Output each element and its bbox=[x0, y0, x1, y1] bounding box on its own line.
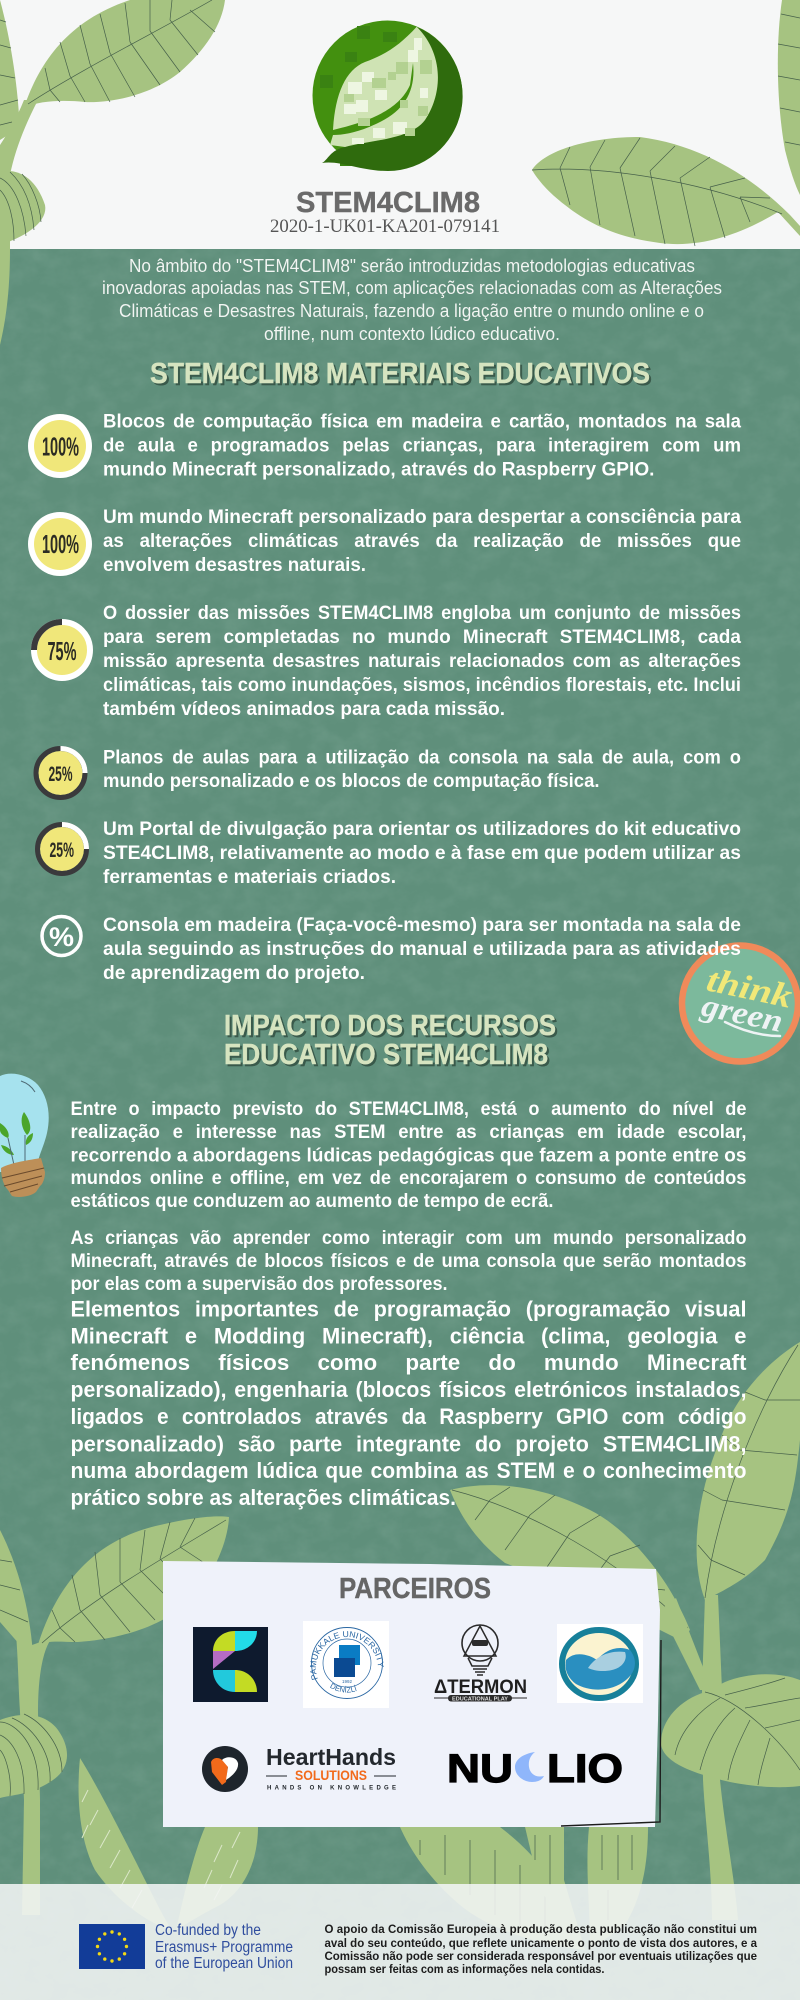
impact text 3 bbox=[70, 1296, 747, 1510]
text: Um Portal de divulgação para orientar os utilizadores do kit educativo bbox=[103, 818, 741, 840]
text: de aula e programados pelas crianças, para interagirem com um bbox=[103, 434, 741, 456]
text: climáticas, tais como inundações, sismos, incêndios florestais, etc. Inclui bbox=[103, 674, 741, 696]
impact text 1: mundos online e offline, em vez de encorajarem o consumo de conteúdos bbox=[70, 1167, 747, 1189]
impact text 2: por elas com a supervisão dos professores. bbox=[70, 1273, 448, 1295]
text: O dossier das missões STEM4CLIM8 engloba um conjunto de missões bbox=[103, 602, 741, 624]
logo: HeartHands Solutions: HeartHands bbox=[266, 1744, 396, 1770]
text: as alterações climáticas através da realização de missões que bbox=[103, 530, 741, 552]
logo: STEM4CLIM8 leaf emblem bbox=[312, 20, 463, 171]
co-funded text: Erasmus+ Programme bbox=[155, 1939, 293, 1956]
impact text 3: numa abordagem lúdica que combina as STEM e o conhecimento bbox=[70, 1458, 746, 1483]
disclaimer: O apoio da Comissão Europeia à produção desta publicação não constitui um bbox=[324, 1924, 757, 1936]
logo: NUCLIO: NU bbox=[447, 1747, 513, 1791]
logo: NUCLIO: LIO bbox=[547, 1747, 623, 1791]
logo: Pamukkale University: DENİZLİ bbox=[330, 1683, 356, 1693]
logo: HeartHands Solutions: HANDS ON KNOWLEDGE bbox=[267, 1786, 396, 1792]
intro text bbox=[102, 255, 722, 344]
logo: Pamukkale University bbox=[303, 1621, 389, 1708]
project code: 2020-1-UK01-KA201-079141 bbox=[270, 217, 500, 237]
text: ferramentas e materiais criados. bbox=[103, 866, 396, 888]
material 6 bbox=[42, 914, 741, 984]
icon: light bulb bbox=[0, 1074, 49, 1197]
impact text 3: fenómenos físicos como parte do mundo Minecraft bbox=[70, 1350, 747, 1375]
progress ring 75%: 75% bbox=[48, 636, 76, 666]
text: STE4CLIM8, relativamente ao modo e à fase em que podem utilizar as bbox=[103, 842, 741, 864]
logo: K bbox=[193, 1627, 268, 1702]
progress ring 100% bbox=[28, 512, 92, 576]
logo: Pamukkale University: PAMUKKALE UNIVERSITY bbox=[310, 1631, 384, 1680]
disclaimer: Comissão não pode ser considerada responsável por eventuais utilizações que bbox=[324, 1951, 757, 1963]
text: Blocos de computação física em madeira e cartão, montados na sala bbox=[103, 410, 741, 432]
material 5 bbox=[38, 818, 741, 888]
intro text: No âmbito do "STEM4CLIM8" serão introduzidas metodologias educativas bbox=[129, 255, 695, 276]
material 2 bbox=[28, 506, 741, 576]
impact text 3: personalizado), engenharia (blocos físicos eletrónicos instalados, bbox=[70, 1377, 746, 1402]
impact text 3: ligados e controlados através da Raspberry GPIO com código bbox=[70, 1404, 746, 1429]
text: envolvem desastres naturais. bbox=[103, 554, 366, 576]
impact text 3: Elementos importantes de programação (programação visual bbox=[70, 1296, 746, 1322]
impact text 2: As crianças vão aprender como interagir com um mundo personalizado bbox=[70, 1227, 747, 1249]
title: STEM4CLIM8: STEM4CLIM8 bbox=[296, 187, 480, 219]
impact text 1: Entre o impacto previsto do STEM4CLIM8, está o aumento do nível de bbox=[70, 1098, 747, 1120]
co-funded text: of the European Union bbox=[155, 1955, 293, 1972]
progress ring 100%: 100% bbox=[42, 432, 79, 462]
intro text: inovadoras apoiadas nas STEM, com aplicações relacionadas com as Alterações bbox=[102, 277, 722, 298]
impact text 1 bbox=[70, 1098, 747, 1212]
text: para serem completadas no mundo Minecraft STEM4CLIM8, cada bbox=[103, 626, 741, 648]
disclaimer bbox=[324, 1924, 758, 1976]
heading: impacto bbox=[224, 1010, 556, 1071]
intro text: Climáticas e Desastres Naturais, fazendo a ligação entre o mundo online e o bbox=[119, 300, 704, 321]
impact text 1: realização e interesse nas STEM entre as crianças em idade escolar, bbox=[70, 1121, 746, 1143]
material 3 bbox=[34, 602, 741, 720]
heading: impacto: IMPACTO DOS RECURSOS bbox=[224, 1010, 556, 1042]
material 4 bbox=[36, 746, 741, 798]
logo: EU flag bbox=[79, 1924, 145, 1969]
impact text 3: prático sobre as alterações climáticas. bbox=[70, 1485, 456, 1510]
logo: water association bbox=[557, 1624, 643, 1703]
leaves: bottom plants bbox=[0, 1342, 800, 1950]
text: mundo Minecraft personalizado, através do Raspberry GPIO. bbox=[103, 458, 654, 480]
text bbox=[103, 818, 741, 888]
logo: Pamukkale University: 1992 bbox=[342, 1679, 353, 1684]
heading: impacto: EDUCATIVO STEM4CLIM8 bbox=[224, 1039, 548, 1071]
text: também vídeos animados para cada missão. bbox=[103, 698, 505, 720]
impact text 2: Minecraft, através de blocos físicos e de uma consola que serão montados bbox=[70, 1250, 747, 1272]
text bbox=[103, 914, 741, 984]
text bbox=[103, 410, 741, 480]
progress ring 75% bbox=[34, 622, 90, 678]
progress ring 25%: 25% bbox=[50, 839, 74, 862]
text: mundo personalizado e os blocos de computação física. bbox=[103, 770, 600, 792]
icon: percent: % bbox=[49, 922, 74, 952]
disclaimer: aval do seu conteúdo, que reflete unicamente o ponto de vista dos autores, e a bbox=[324, 1938, 758, 1950]
logo: Atermon bbox=[434, 1625, 527, 1702]
intro text: offline, num contexto lúdico educativo. bbox=[264, 323, 560, 344]
progress ring 25% bbox=[38, 824, 86, 874]
impact text 3: personalizado) são parte integrante do projeto STEM4CLIM8, bbox=[70, 1432, 746, 1456]
text: Planos de aulas para a utilização da consola na sala de aula, com o bbox=[103, 746, 741, 768]
footer band bbox=[0, 1884, 800, 2000]
progress ring 25% bbox=[36, 748, 85, 798]
text bbox=[103, 506, 741, 576]
text bbox=[103, 602, 741, 720]
material 1 bbox=[28, 410, 741, 480]
heading: parceiros: PARCEIROS bbox=[339, 1573, 491, 1605]
progress ring 25%: 25% bbox=[48, 763, 73, 786]
logo: Atermon: ΔTERMON bbox=[434, 1677, 527, 1698]
panel: parceiros bbox=[163, 1561, 662, 1827]
co-funded text bbox=[155, 1922, 293, 1972]
badge: think green bbox=[682, 946, 798, 1062]
logo: HeartHands Solutions bbox=[202, 1744, 396, 1792]
leaves: top right plant bbox=[532, 0, 800, 246]
impact text 2 bbox=[70, 1227, 747, 1295]
logo: NUCLIO bbox=[447, 1747, 623, 1791]
disclaimer: possam ser feitas com as informações nela contidas. bbox=[324, 1964, 604, 1976]
badge: think green: green bbox=[697, 986, 786, 1039]
text: Consola em madeira (Faça-você-mesmo) para ser montada na sala de bbox=[103, 914, 741, 936]
text bbox=[103, 746, 741, 792]
icon: percent bbox=[42, 916, 81, 956]
text: missão apresenta desastres naturais relacionados com as alterações bbox=[103, 650, 741, 672]
progress ring 100% bbox=[28, 414, 92, 478]
text: Um mundo Minecraft personalizado para despertar a consciência para bbox=[103, 506, 741, 528]
text: aula seguindo as instruções do manual e utilizada para as atividades bbox=[103, 938, 741, 960]
background: white header bbox=[0, 0, 800, 249]
impact text 1: estáticos que conduzem ao aumento de tempo de ecrã. bbox=[70, 1190, 554, 1212]
text: de aprendizagem do projeto. bbox=[103, 962, 365, 984]
logo: Atermon: EDUCATIONAL PLAY bbox=[452, 1696, 508, 1702]
impact text 1: recorrendo a abordagens lúdicas pedagógicas que fazem a ponte entre os bbox=[70, 1144, 747, 1166]
leaves: top left plant bbox=[0, 0, 225, 345]
heading: materiais educativos: STEM4CLIM8 MATERIAIS EDUCATIVOS bbox=[150, 358, 650, 390]
impact text 3: Minecraft e Modding Minecraft), ciência (clima, geologia e bbox=[70, 1324, 746, 1348]
badge: think green: think bbox=[703, 962, 795, 1016]
progress ring 100%: 100% bbox=[42, 529, 79, 559]
logo: HeartHands Solutions: SOLUTIONS bbox=[295, 1768, 367, 1783]
co-funded text: Co-funded by the bbox=[155, 1922, 261, 1939]
